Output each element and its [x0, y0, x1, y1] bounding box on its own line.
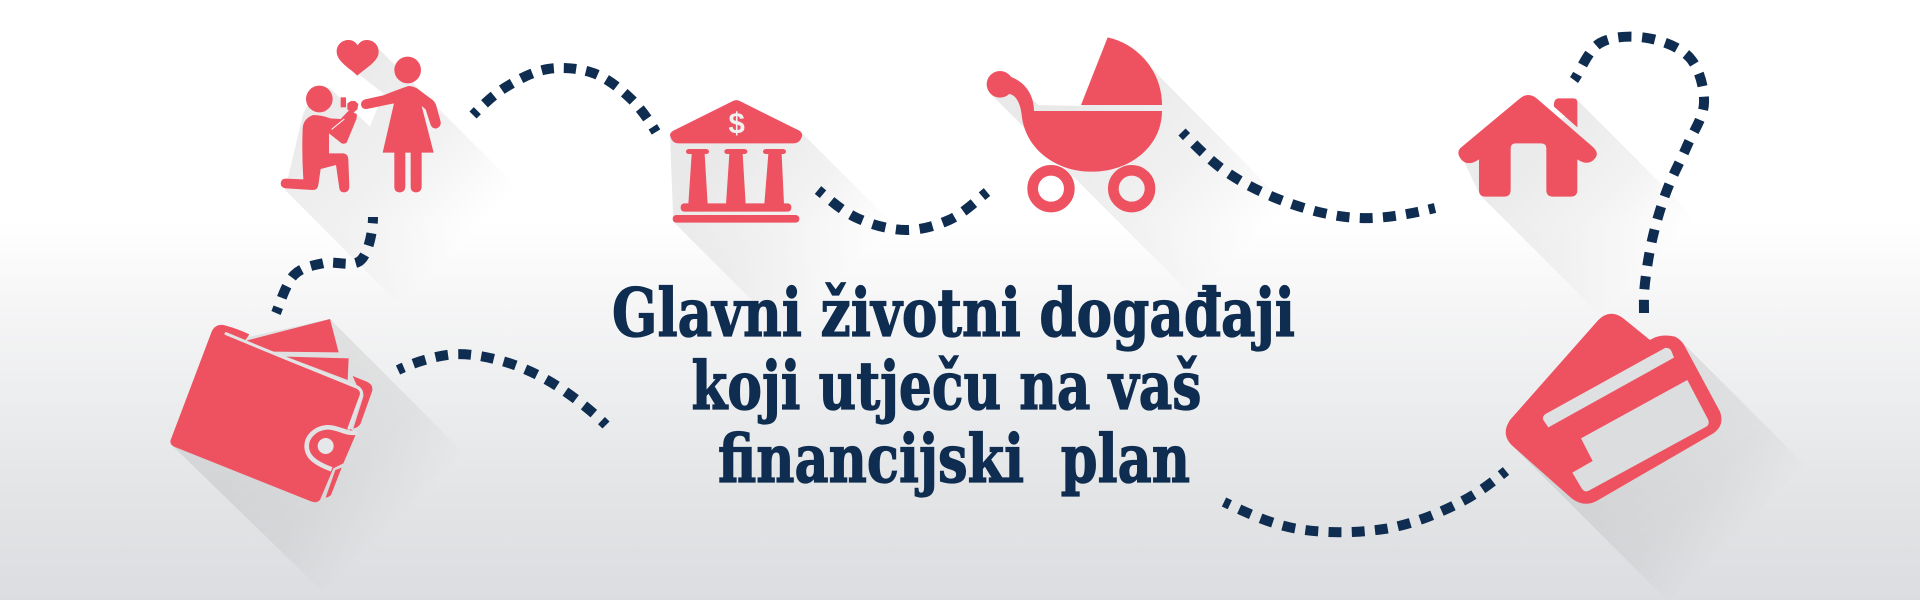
arrow: dotted path couple to bank: [473, 68, 656, 132]
arrow: dotted path stroller to house: [1182, 132, 1435, 218]
icon: wallet: [170, 319, 463, 592]
icon: baby stroller: [987, 37, 1291, 302]
icon: bank building: [670, 100, 895, 334]
icon: bank building: $: [729, 107, 745, 140]
icon: house: [1458, 95, 1697, 316]
icon: credit cards: [1506, 314, 1805, 600]
title: Glavni životni događaji: [612, 274, 1295, 352]
title: financijski plan: [718, 420, 1190, 498]
arrow: dotted path wallet to title: [398, 354, 606, 425]
title: [612, 274, 1295, 498]
arrow: dotted path bank to stroller: [818, 190, 987, 230]
arrow: dotted path title to card: [1224, 471, 1506, 532]
arrow: dotted path card to house: [1574, 37, 1704, 313]
icon: couple proposal with heart: [281, 40, 522, 308]
arrow: dotted path wallet to couple: [276, 217, 373, 313]
title: koji utječu na vaš: [692, 347, 1202, 425]
